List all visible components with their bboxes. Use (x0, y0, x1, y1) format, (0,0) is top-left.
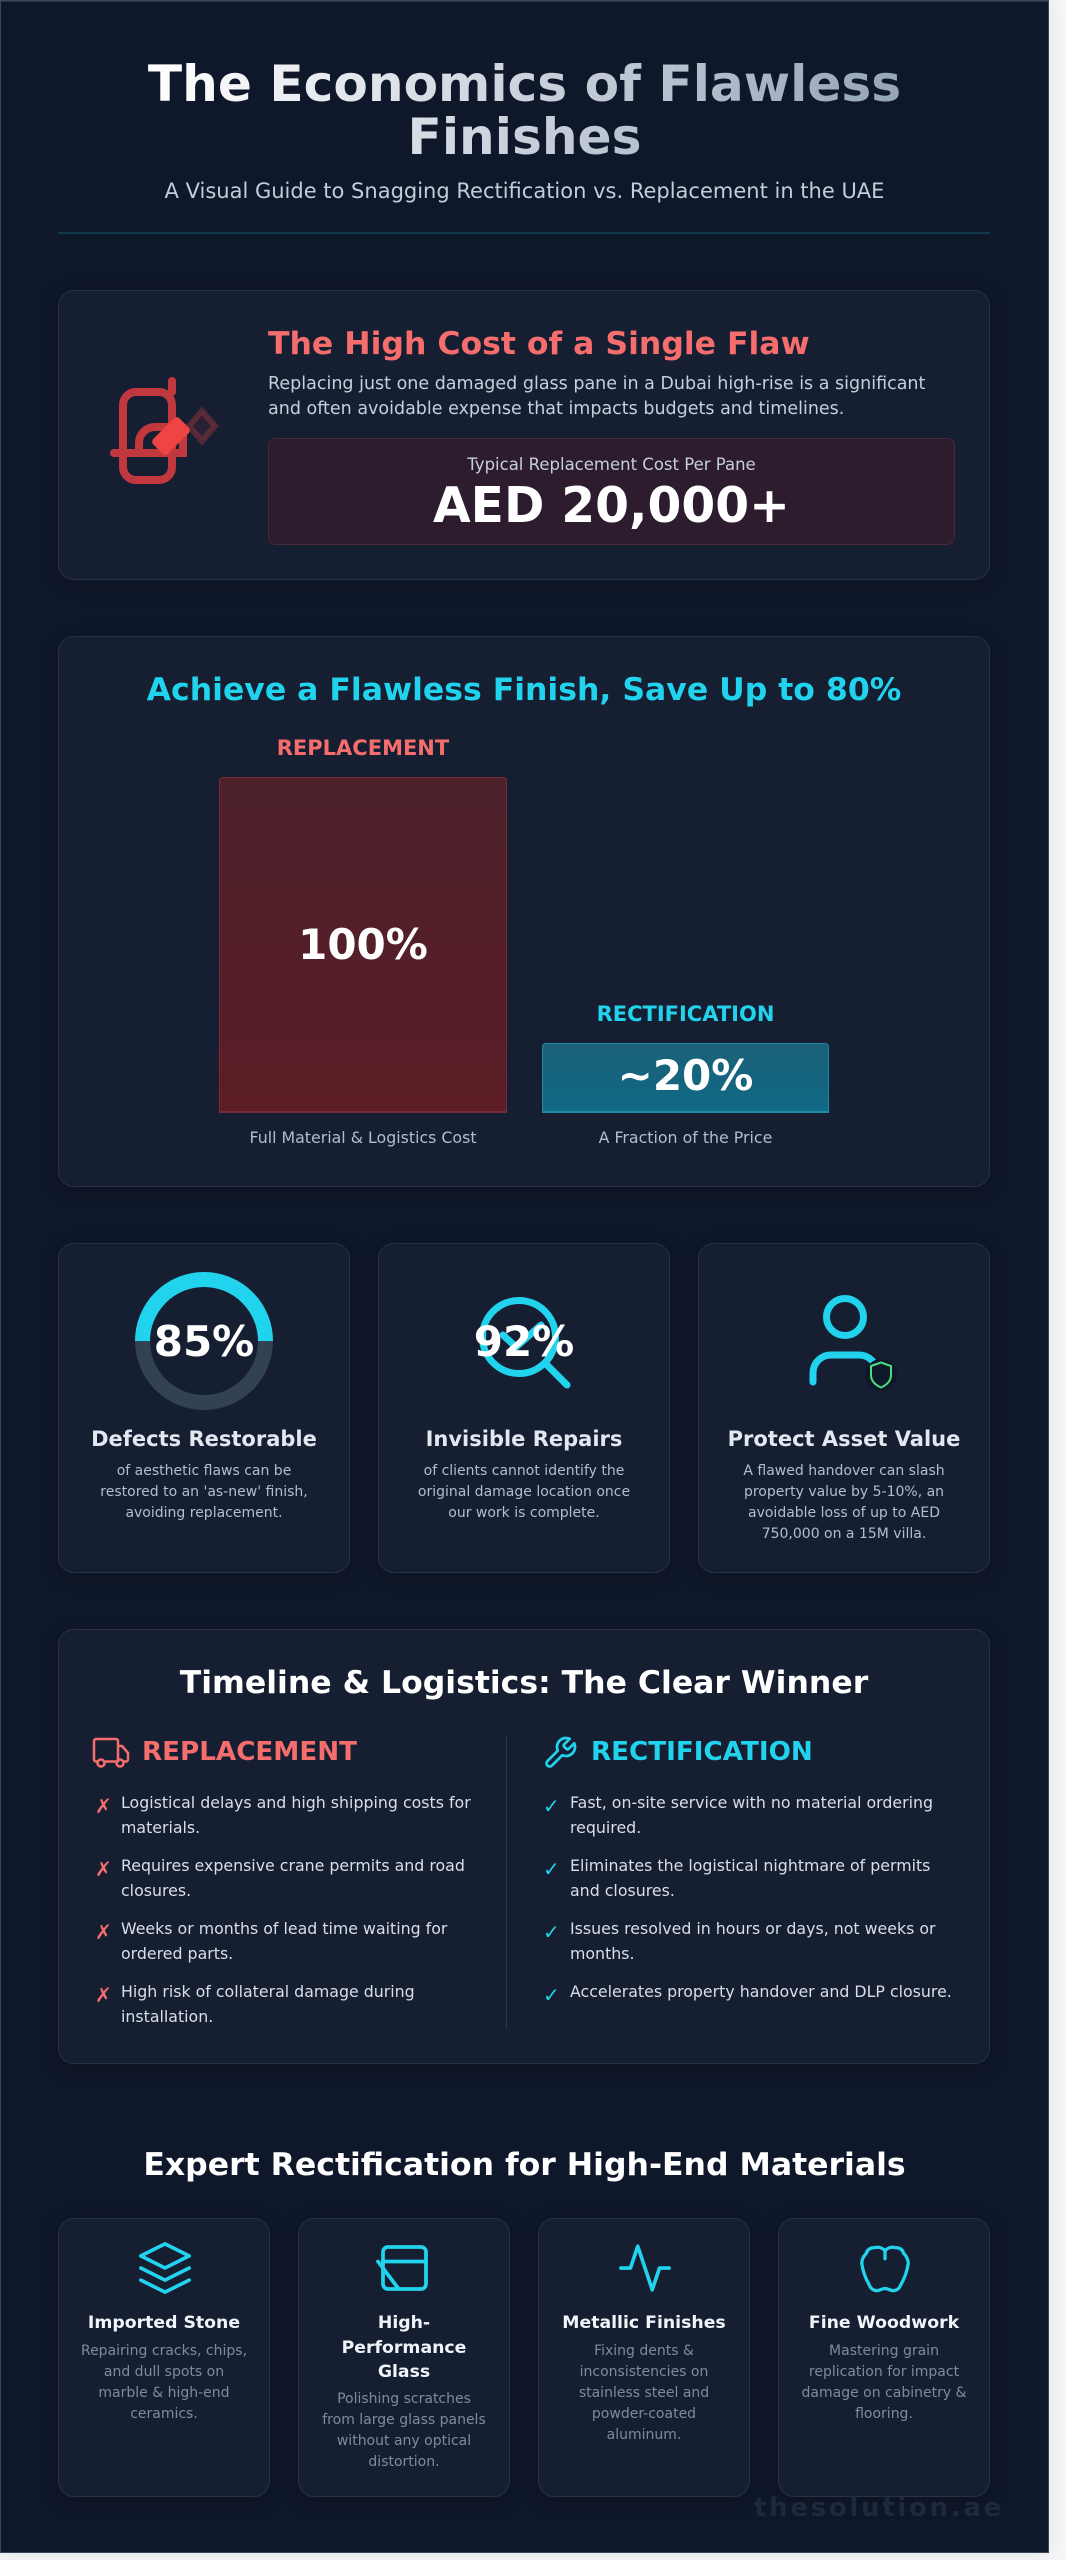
item text: closures. (121, 1880, 191, 1900)
card title: Fine Woodwork (809, 2313, 959, 2333)
check mark: ✓ (543, 1857, 560, 1881)
header (148, 54, 901, 203)
list item (95, 1982, 415, 2026)
item text: Accelerates property handover and DLP closure. (570, 1982, 952, 2001)
card description: distortion. (368, 2454, 440, 2470)
bar value: 100% (298, 920, 428, 969)
card title: High- (378, 2313, 430, 2333)
item text: Issues resolved in hours or days, not weeks or (570, 1919, 936, 1938)
donut chart 85% (135, 1272, 273, 1410)
list item (543, 1793, 933, 1836)
card description (322, 2391, 486, 2470)
stat description (743, 1463, 945, 1542)
card description: ceramics. (130, 2406, 198, 2422)
stat description: avoiding replacement. (125, 1505, 283, 1521)
item text (121, 1982, 415, 2026)
column: replacement (92, 1737, 471, 2026)
stat description: original damage location once (418, 1484, 630, 1500)
icon: wood grain (860, 2246, 910, 2292)
body text: Replacing just one damaged glass pane in a Dubai high-rise is a significant (268, 374, 925, 394)
panel: protect asset value (698, 1243, 990, 1573)
cross mark: ✗ (95, 1857, 112, 1881)
item text: months. (570, 1944, 635, 1962)
stat title: Invisible Repairs (426, 1427, 622, 1451)
bar body (542, 1043, 829, 1113)
stat value: 85% (154, 1317, 254, 1366)
item text (121, 1856, 465, 1900)
column heading: REPLACEMENT (142, 1737, 357, 1767)
bar value: ~20% (618, 1051, 753, 1100)
stat title: Protect Asset Value (728, 1427, 960, 1451)
card description: Polishing scratches (337, 2391, 471, 2407)
stat description: of aesthetic flaws can be (117, 1463, 291, 1479)
card description (802, 2343, 966, 2422)
card title: Metallic Finishes (562, 2313, 726, 2333)
card description: replication for impact (809, 2364, 959, 2380)
bar caption: A Fraction of the Price (599, 1128, 772, 1147)
section heading: materials: Expert Rectification for High-End Materials (143, 2147, 906, 2183)
card description: stainless steel and (579, 2385, 709, 2401)
panel: timeline and logistics (58, 1629, 990, 2064)
title (0, 57, 1049, 163)
list item (95, 1793, 471, 1836)
icon: truck (92, 1738, 130, 1768)
bar label: RECTIFICATION (597, 1002, 774, 1026)
check mark: ✓ (543, 1920, 560, 1944)
stat description (100, 1463, 308, 1521)
stat description: of clients cannot identify the (424, 1463, 624, 1479)
panel: savings bar chart (58, 636, 990, 1187)
column heading: RECTIFICATION (591, 1737, 813, 1767)
card description: damage on cabinetry & (802, 2385, 966, 2401)
item text: Requires expensive crane permits and road (121, 1856, 465, 1875)
check mark: ✓ (543, 1794, 560, 1818)
card description: Fixing dents & (594, 2343, 694, 2359)
icon: activity pulse (619, 2244, 671, 2292)
heading: The High Cost of a Single Flaw (268, 326, 810, 362)
item text (121, 1793, 471, 1836)
card description (579, 2343, 709, 2443)
item text: Fast, on-site service with no material ordering (570, 1793, 933, 1812)
card description: marble & high-end (98, 2385, 230, 2401)
icon: cracked glass pane (376, 2245, 428, 2291)
item text (570, 1793, 933, 1836)
panel: imported stone (58, 2218, 270, 2497)
list item (95, 1856, 465, 1900)
check mark: ✓ (543, 1983, 560, 2007)
panel: high-performance glass (298, 2218, 510, 2497)
item text: required. (570, 1818, 641, 1836)
cross mark: ✗ (95, 1983, 112, 2007)
subtitle: A Visual Guide to Snagging Rectification vs. Replacement in the UAE (165, 179, 884, 203)
list item (543, 1919, 936, 1962)
bar body (219, 777, 507, 1113)
list item (95, 1919, 448, 1962)
card description: aluminum. (607, 2427, 681, 2443)
watermark: thesolution.ae (754, 2493, 1004, 2523)
stat description: 750,000 on a 15M villa. (762, 1526, 926, 1542)
item text (570, 1919, 936, 1962)
panel: high cost of a single flaw (58, 290, 990, 580)
panel: fine woodwork (778, 2218, 990, 2497)
bar caption: Full Material & Logistics Cost (249, 1128, 477, 1147)
panel: metallic finishes (538, 2218, 750, 2497)
icon: magnifier with check (480, 1297, 570, 1388)
body text: and often avoidable expense that impacts budgets and timelines. (268, 398, 844, 418)
card description: powder-coated (592, 2406, 696, 2422)
icon: damaged glass pane (110, 377, 219, 484)
item text (570, 1856, 930, 1900)
bar: replacement (219, 736, 507, 1147)
callout: replacement cost (268, 438, 955, 545)
item text: and closures. (570, 1880, 675, 1900)
callout label: Typical Replacement Cost Per Pane (467, 455, 756, 474)
title: Finishes (408, 107, 641, 166)
bar: rectification (542, 1002, 829, 1147)
stat description: avoidable loss of up to AED (748, 1505, 940, 1521)
chart heading: Achieve a Flawless Finish, Save Up to 80% (147, 672, 901, 708)
card description: from large glass panels (322, 2412, 486, 2428)
cross mark: ✗ (95, 1794, 112, 1818)
card description: Repairing cracks, chips, (81, 2343, 247, 2359)
icon: wrench (545, 1736, 576, 1768)
list item (543, 1856, 930, 1900)
item text: High risk of collateral damage during (121, 1982, 415, 2001)
stat description (418, 1463, 630, 1521)
stat value: 92% (474, 1317, 574, 1366)
card description: without any optical (337, 2433, 471, 2449)
item text: installation. (121, 2006, 213, 2026)
column: rectification (543, 1736, 952, 2007)
item text (121, 1919, 448, 1962)
stat description: our work is complete. (448, 1505, 600, 1521)
card description: flooring. (855, 2406, 913, 2422)
stat title: Defects Restorable (91, 1427, 317, 1451)
card description: and dull spots on (104, 2364, 224, 2380)
stat description: A flawed handover can slash (743, 1463, 945, 1479)
item text: Weeks or months of lead time waiting for (121, 1919, 447, 1938)
icon: person with shield (810, 1295, 897, 1391)
callout value: AED 20,000+ (433, 478, 790, 534)
panel: defects restorable (58, 1243, 350, 1573)
card description: inconsistencies on (580, 2364, 708, 2380)
card title: Performance (342, 2338, 466, 2358)
icon: layers (138, 2242, 192, 2294)
stat description: restored to an 'as-new' finish, (100, 1484, 308, 1500)
bar label: REPLACEMENT (277, 736, 449, 760)
stat description: property value by 5-10%, an (744, 1484, 944, 1500)
list item (543, 1982, 952, 2007)
panel heading: Timeline & Logistics: The Clear Winner (180, 1665, 868, 1701)
card description: Mastering grain (829, 2343, 939, 2359)
cross mark: ✗ (95, 1920, 112, 1944)
item text: materials. (121, 1818, 200, 1836)
item text: Eliminates the logistical nightmare of permits (570, 1856, 930, 1875)
card title: Glass (378, 2362, 430, 2382)
item text: Logistical delays and high shipping costs for (121, 1793, 471, 1812)
panel: invisible repairs (378, 1243, 670, 1573)
card title (342, 2313, 466, 2382)
item text: ordered parts. (121, 1944, 233, 1962)
card title: Imported Stone (88, 2313, 240, 2333)
title: The Economics of Flawless (148, 54, 901, 113)
body text (268, 374, 925, 418)
card description (81, 2343, 247, 2422)
